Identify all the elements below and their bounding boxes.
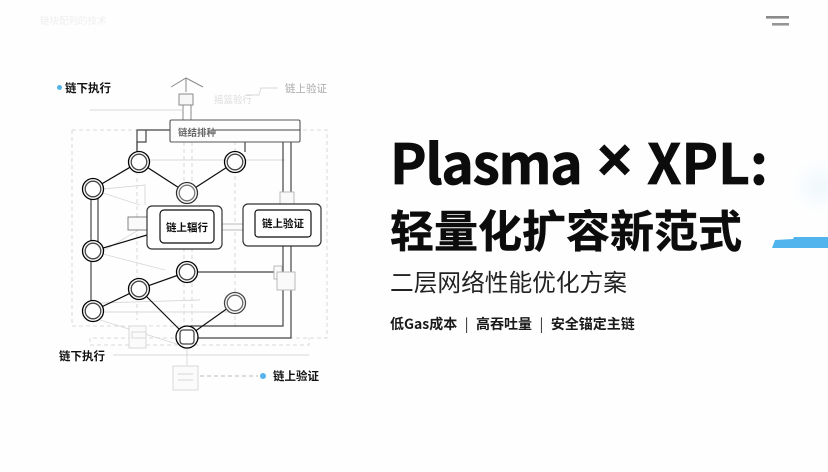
thick signal pipes bbox=[137, 130, 291, 338]
bottom faint modules bbox=[129, 326, 198, 390]
label: bottom-left off-chain: 链下执行 bbox=[59, 348, 105, 364]
feature list: 低Gas成本 | 高吞吐量 | 安全锚定主链 bbox=[390, 314, 635, 334]
label: top-left off-chain: 链下执行 bbox=[65, 80, 111, 96]
pipe joints bbox=[128, 126, 295, 290]
tagline: 二层网络性能优化方案 bbox=[390, 264, 627, 298]
faint top-left caption: 链块配列的技术 bbox=[40, 13, 107, 27]
title: Plasma bbox=[390, 120, 581, 200]
center box: 链上辐行 bbox=[166, 221, 208, 234]
label: top-right on-chain: 链上验证 bbox=[285, 81, 327, 96]
top arrow and connector bbox=[171, 78, 203, 120]
subtitle: 轻量化扩容新范式 bbox=[390, 196, 742, 260]
center box bbox=[147, 206, 222, 249]
right verification box: 链上验证 bbox=[262, 217, 304, 230]
top router box: 链结排种 bbox=[178, 127, 217, 139]
dashed frames bbox=[72, 120, 327, 345]
title: XPL: bbox=[647, 120, 768, 200]
faint connector lines bbox=[90, 88, 309, 376]
faint label: 摇篮验行 bbox=[214, 94, 253, 106]
label: bottom-right on-chain: 链上验证 bbox=[273, 368, 319, 384]
node links bbox=[93, 162, 235, 337]
title bbox=[390, 120, 768, 200]
title: × bbox=[597, 126, 632, 193]
top router box bbox=[170, 120, 300, 142]
nodes bbox=[82, 152, 246, 348]
right verification box bbox=[243, 204, 321, 246]
